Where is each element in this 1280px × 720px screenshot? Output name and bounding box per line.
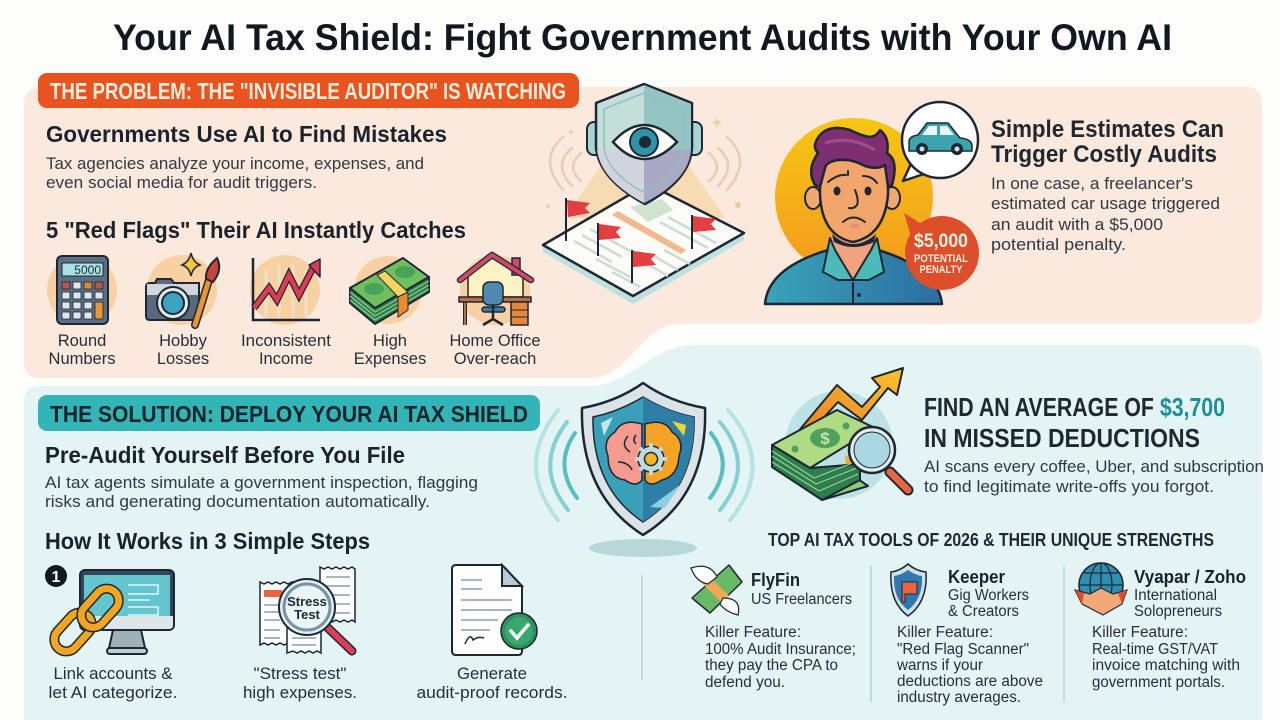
tool: FlyFin (691, 565, 856, 691)
heading: simple estimates (991, 116, 1224, 168)
tool: Keeper: "Red Flag Scanner" (897, 641, 1029, 658)
tool: Vyapar / Zoho: Solopreneurs (1134, 603, 1222, 620)
icon: receipts under magnifier: Stress (287, 594, 327, 609)
heading: pre-audit: Pre-Audit Yourself Before You File (45, 442, 405, 468)
problem banner (38, 73, 579, 108)
heading: red flags: 5 "Red Flags" Their AI Instantly Catches (46, 217, 466, 243)
illustration: worried freelancer: PENALTY (920, 264, 963, 276)
text block: freelancer case: potential penalty. (991, 236, 1126, 254)
solution banner (38, 395, 540, 431)
label: step 1: Link accounts & (54, 665, 172, 683)
tool: Vyapar / Zoho (1075, 563, 1246, 691)
illustration: money, rising arrow, magnifier: $ (820, 429, 830, 448)
tool: Vyapar / Zoho: International (1134, 587, 1217, 604)
label: step 3 (416, 665, 568, 702)
text block: tax agencies: Tax agencies analyze your income, expenses, and (46, 155, 424, 173)
illustration: AI tax shield (536, 383, 753, 557)
label: home office over-reach: Home Office (450, 332, 540, 350)
text block: AI tax agents (45, 474, 478, 511)
label: high expenses: High (373, 332, 407, 350)
illustration: invisible auditor shield over document (543, 84, 744, 304)
heading: simple estimates: Trigger Costly Audits (991, 141, 1217, 168)
heading: governments use AI: Governments Use AI to Find Mistakes (46, 121, 447, 147)
tool: Keeper: & Creators (948, 603, 1019, 620)
text block: AI scans: AI scans every coffee, Uber, and subscription (924, 458, 1264, 476)
icon: inconsistent income chart (250, 255, 320, 325)
solution banner: THE SOLUTION: DEPLOY YOUR AI TAX SHIELD (50, 401, 528, 427)
label: round numbers (49, 332, 115, 368)
tool: FlyFin: US Freelancers (751, 591, 852, 608)
tool: Keeper: warns if your (896, 657, 983, 674)
label: step 3: Generate (457, 665, 527, 683)
tool: Vyapar / Zoho: Vyapar / Zoho (1134, 567, 1246, 587)
step 1 number: 1 (52, 569, 61, 586)
label: hobby losses (157, 332, 209, 368)
text block: freelancer case: In one case, a freelancer's (991, 175, 1193, 193)
problem banner: THE PROBLEM: THE "INVISIBLE AUDITOR" IS WATCHING (50, 78, 566, 104)
text block: AI scans: to find legitimate write-offs you forgot. (924, 478, 1214, 496)
icon: globe and handshake (1075, 563, 1127, 615)
tool: Keeper: Keeper (948, 567, 1005, 587)
icon: document with check (452, 565, 537, 655)
heading: find an average (924, 392, 1225, 453)
text block: tax agencies (46, 155, 424, 192)
icon: home office over-reach (459, 255, 531, 325)
label: hobby losses: Losses (157, 350, 209, 368)
text block: AI tax agents: AI tax agents simulate a government inspection, flagging (45, 474, 478, 492)
heading: simple estimates: Simple Estimates Can (991, 116, 1224, 143)
tool: FlyFin: 100% Audit Insurance; (705, 641, 856, 658)
text block: freelancer case: estimated car usage triggered (991, 195, 1220, 213)
icon: shield with flag (891, 564, 926, 616)
heading: find an average: IN MISSED DEDUCTIONS (924, 423, 1200, 453)
tool: FlyFin: they pay the CPA to (705, 657, 838, 674)
icon: calculator round numbers (47, 255, 117, 325)
illustration: worried freelancer: POTENTIAL (914, 253, 968, 265)
tool: FlyFin: FlyFin (751, 570, 800, 590)
label: inconsistent income: Income (259, 350, 313, 368)
label: home office over-reach (450, 332, 540, 368)
panel: solution background (24, 345, 1262, 720)
label: round numbers: Round (58, 332, 106, 350)
text block: freelancer case: an audit with a $5,000 (991, 216, 1163, 234)
illustration: worried freelancer (765, 102, 979, 304)
label: inconsistent income: Inconsistent (241, 332, 331, 350)
text block: freelancer case (991, 175, 1220, 254)
tool: Vyapar / Zoho: Killer Feature: (1092, 624, 1188, 641)
label: step 3: audit-proof records. (416, 684, 568, 702)
step 1 number (45, 565, 67, 587)
illustration: money, rising arrow, magnifier (772, 368, 908, 500)
label: high expenses (354, 332, 426, 368)
text block: tax agencies: even social media for audit triggers. (46, 174, 317, 192)
text block: AI scans (924, 458, 1264, 496)
illustration: worried freelancer: $5,000 (914, 231, 968, 252)
icon: receipts under magnifier (260, 567, 355, 653)
label: hobby losses: Hobby (159, 332, 208, 350)
label: inconsistent income (241, 332, 331, 368)
tool: Keeper (891, 564, 1043, 706)
icon: calculator round numbers: 5000 (74, 263, 101, 277)
tool: Vyapar / Zoho: government portals. (1092, 674, 1225, 691)
icon: stack of money high expenses (350, 256, 429, 324)
icon: monitor with chain link (49, 570, 174, 656)
tool: Keeper: Gig Workers (948, 587, 1029, 604)
tool: FlyFin: defend you. (705, 674, 785, 691)
label: step 1 (48, 665, 178, 702)
tool: Vyapar / Zoho: Real-time GST/VAT (1092, 641, 1218, 658)
tool: FlyFin: Killer Feature: (705, 624, 801, 641)
tool: Keeper: industry averages. (897, 689, 1021, 706)
heading: find an average: FIND AN AVERAGE OF $3,700 (924, 392, 1225, 422)
label: home office over-reach: Over-reach (454, 350, 536, 368)
tool: Keeper: deductions are above (897, 673, 1043, 690)
label: step 1: let AI categorize. (48, 684, 178, 702)
label: round numbers: Numbers (49, 350, 115, 368)
icon: receipts under magnifier: Test (294, 607, 321, 622)
icon: camera and brush hobby losses (146, 253, 219, 325)
icon: flying money (691, 565, 742, 615)
title: Your AI Tax Shield: Fight Government Audits with Your Own AI (113, 17, 1172, 58)
panel: problem background (24, 87, 1262, 378)
label: step 2: "Stress test" (254, 665, 347, 683)
label: step 2: high expenses. (243, 684, 357, 702)
label: step 2 (243, 665, 357, 702)
heading: top AI tax tools: TOP AI TAX TOOLS OF 2026 & THEIR UNIQUE STRENGTHS (768, 530, 1214, 550)
text block: AI tax agents: risks and generating documentation automatically. (45, 493, 430, 511)
tool: Vyapar / Zoho: invoice matching with (1092, 657, 1240, 674)
tool: Keeper: Killer Feature: (897, 624, 993, 641)
label: high expenses: Expenses (354, 350, 426, 368)
heading: how it works: How It Works in 3 Simple Steps (45, 528, 370, 554)
